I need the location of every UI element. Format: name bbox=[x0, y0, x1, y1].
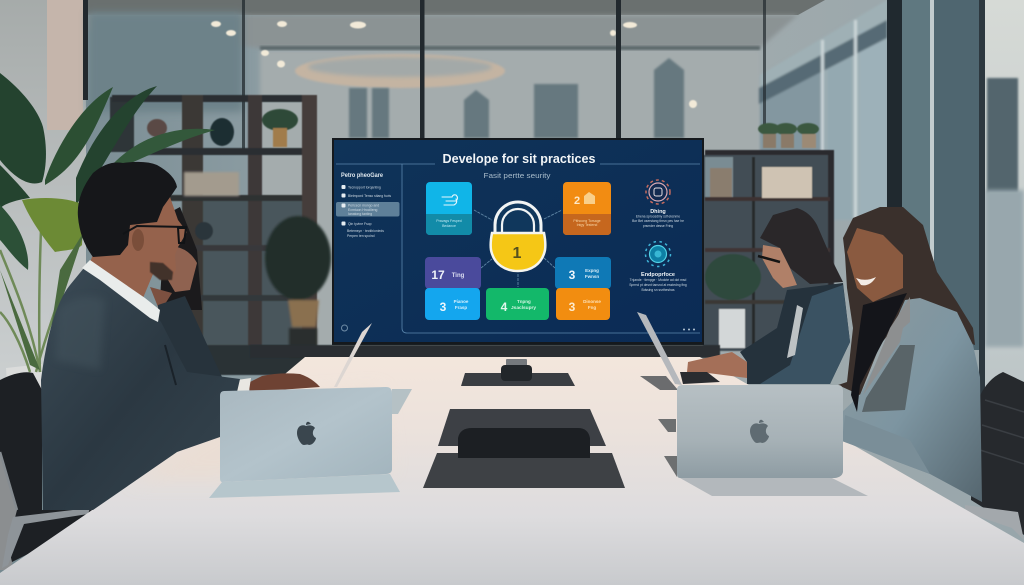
man beard bbox=[150, 262, 173, 280]
presentation screen bbox=[332, 138, 704, 345]
man arm crease bbox=[165, 345, 176, 385]
apple logo bbox=[750, 420, 769, 443]
blazer shoulder tone bbox=[760, 285, 850, 384]
books bbox=[762, 167, 812, 198]
curtain and window frame bbox=[887, 0, 902, 300]
sidebar items: Blelmpord Tenso stiang fuvis bbox=[348, 194, 391, 198]
left glass reflection bbox=[88, 12, 243, 112]
shelf plant bbox=[705, 254, 761, 300]
sidebar items bbox=[347, 186, 391, 238]
laptop lid bbox=[637, 312, 682, 385]
big plant bbox=[0, 73, 215, 400]
padlock bbox=[491, 202, 545, 271]
pad: back bbox=[461, 373, 575, 386]
shirt bbox=[787, 305, 803, 358]
man shirt collar bbox=[82, 260, 160, 322]
shackle bbox=[495, 202, 541, 243]
screen subtitle: Fasit pertte seurity bbox=[484, 171, 551, 180]
card label word: Ting bbox=[452, 273, 465, 279]
device: speaker bbox=[458, 428, 590, 458]
exterior skyscraper bbox=[987, 78, 1018, 193]
lime leaf bbox=[22, 198, 84, 252]
man cuff bbox=[236, 378, 251, 391]
ring ceiling lamp bbox=[295, 54, 505, 88]
curtain one bbox=[902, 0, 930, 300]
woman behind man bbox=[150, 207, 222, 377]
ceiling lower band bbox=[86, 15, 798, 48]
small book group bbox=[710, 168, 732, 197]
card words: Pianoe bbox=[454, 299, 469, 304]
exterior window bbox=[985, 0, 1024, 400]
curtain two bbox=[934, 0, 979, 350]
plant leaves bbox=[0, 73, 215, 270]
label two body: Sprrnd pt desnt tansnd at esstedng fing bbox=[629, 283, 687, 287]
plant pot bbox=[6, 364, 42, 400]
right woman bbox=[838, 207, 982, 502]
sidebar highlight bbox=[336, 202, 400, 216]
shackle inner bbox=[502, 209, 534, 240]
sidebar round icon bbox=[342, 325, 348, 331]
lid bbox=[334, 323, 372, 387]
label two body: Tnjande · tlenpge · Modcte ad dot msd bbox=[630, 278, 686, 282]
dark glass mullions bbox=[83, 0, 766, 150]
man jacket bbox=[41, 263, 240, 510]
screen rules bbox=[336, 164, 700, 333]
man neck and face bbox=[90, 197, 187, 298]
man arm hand bbox=[248, 373, 320, 392]
card caption second line: Intgy Testend bbox=[577, 223, 597, 227]
laptop shadow bbox=[680, 478, 868, 496]
hair bbox=[160, 207, 202, 310]
label one body: Bor Bet oserstang thrsn pes hae he bbox=[632, 219, 684, 223]
card caption second line: Bedance bbox=[442, 224, 456, 228]
warm reflection bbox=[130, 390, 390, 480]
binders bbox=[719, 309, 745, 348]
wall column bbox=[47, 0, 83, 130]
smile bbox=[856, 277, 876, 285]
apple logo bbox=[297, 422, 316, 445]
card words: Dinonse bbox=[583, 299, 601, 304]
plant stems bbox=[0, 205, 84, 372]
card words: Expng bbox=[585, 268, 599, 273]
card: orange bottom bbox=[556, 288, 610, 320]
shelf red vase bbox=[147, 119, 167, 137]
sun inner disc bbox=[650, 246, 666, 262]
ring lamp inner bbox=[308, 57, 492, 77]
pad: front bbox=[423, 453, 625, 488]
sidebar items: Betemsyn · tectibionieds bbox=[347, 229, 384, 233]
card number: 3 bbox=[569, 300, 576, 314]
chair left bbox=[0, 372, 93, 570]
chair frame bbox=[0, 452, 17, 510]
laptop lid bbox=[220, 387, 392, 482]
keyboard bbox=[680, 372, 720, 384]
pad: right edge bbox=[640, 376, 678, 390]
face bbox=[762, 245, 797, 288]
floor plant bbox=[265, 216, 331, 358]
lock body bbox=[491, 233, 545, 271]
pad: middle bbox=[438, 409, 606, 446]
sidebar heading: Petro pheoGare bbox=[341, 173, 384, 179]
exterior blurred city bbox=[985, 190, 1024, 347]
man ear bbox=[132, 229, 144, 251]
hair behind bbox=[838, 207, 975, 395]
back left laptop bbox=[334, 323, 412, 414]
man hair bbox=[78, 162, 177, 257]
card: purple bbox=[425, 257, 481, 289]
shelf left bbox=[110, 95, 331, 375]
label two body: Bdssing sn ssrtheshas bbox=[642, 288, 675, 292]
sun glyph bbox=[654, 250, 662, 258]
card words second line: Frasp bbox=[455, 305, 467, 310]
thin leaf blades bbox=[0, 230, 85, 370]
laptop mat bbox=[392, 389, 412, 414]
laptop front right bbox=[664, 385, 868, 496]
sidebar items: Exmtuon Hrocilleng bbox=[348, 208, 378, 212]
card number: 3 bbox=[440, 300, 447, 314]
label two body bbox=[629, 278, 687, 292]
sidebar items: Ianatong taxting bbox=[348, 212, 372, 216]
curtain highlight bbox=[930, 0, 934, 300]
card: top left bbox=[426, 182, 472, 235]
card label: 17 bbox=[431, 268, 445, 282]
screen bezel bbox=[332, 138, 704, 345]
card number: 3 bbox=[569, 268, 576, 282]
neck bbox=[150, 287, 172, 312]
card number: 2 bbox=[574, 195, 580, 207]
card number: 4 bbox=[501, 300, 508, 314]
blazer dark panel bbox=[862, 345, 915, 412]
shelf right bbox=[703, 123, 834, 351]
card caption: Pithoong Torsage bbox=[573, 219, 601, 223]
hands bbox=[687, 352, 747, 378]
hair bbox=[760, 208, 843, 284]
back woman bbox=[637, 208, 850, 385]
window frame edge bbox=[979, 0, 985, 400]
laptop lid bbox=[677, 385, 843, 478]
right label two: Endpoprfoce bbox=[641, 272, 675, 278]
blazer bbox=[740, 283, 850, 384]
screen panel bbox=[334, 140, 702, 342]
chair back bbox=[0, 372, 93, 562]
connector lines bbox=[474, 210, 562, 287]
label one body: prsmder desse Fring bbox=[643, 224, 673, 228]
laptop shadow bbox=[209, 474, 400, 498]
card lower band bbox=[563, 214, 611, 235]
right label two bbox=[629, 272, 687, 292]
left wall bbox=[0, 0, 86, 400]
card icon bbox=[584, 192, 595, 204]
man glasses bbox=[123, 226, 187, 243]
dark strip under screen bbox=[250, 345, 720, 358]
label one body bbox=[632, 214, 684, 228]
badge inner ring bbox=[649, 183, 667, 201]
sidebar items: Peircecn mongo and bbox=[348, 204, 379, 208]
jacket bbox=[158, 296, 222, 377]
glasses bbox=[758, 256, 780, 262]
right label one: Dhing bbox=[650, 209, 666, 215]
man jacket highlight bbox=[55, 297, 105, 370]
sidebar items: Qin tyvine Fsop bbox=[348, 222, 372, 226]
books on shelf bbox=[184, 172, 239, 196]
shelf globe lamp bbox=[195, 222, 213, 240]
card words: Tnpng bbox=[517, 299, 531, 304]
shelf pot plant bbox=[262, 109, 298, 147]
card icon bbox=[442, 195, 458, 205]
ceiling beam bbox=[260, 46, 760, 50]
table bbox=[0, 357, 1024, 585]
right side window bays bbox=[759, 0, 887, 220]
blurred towers bbox=[349, 58, 684, 138]
far wall bbox=[260, 50, 760, 350]
sidebar bullets bbox=[342, 185, 346, 226]
card words second line: Jsaclsupry bbox=[511, 305, 536, 311]
chair armrest bbox=[2, 508, 90, 568]
card: blue left bbox=[425, 288, 480, 320]
lapel bbox=[863, 297, 910, 395]
face bbox=[847, 228, 903, 302]
laptop front left bbox=[209, 387, 400, 498]
man bbox=[41, 162, 320, 510]
card: green bbox=[486, 288, 549, 320]
device: back hub bbox=[501, 359, 532, 381]
blazer bbox=[842, 298, 982, 502]
chair armrest bbox=[965, 505, 1024, 540]
laptop hinge mat bbox=[664, 456, 677, 477]
icon: sun badge bbox=[646, 242, 670, 266]
pagination dots bbox=[683, 328, 695, 330]
card words second line: Fwnsn bbox=[585, 274, 599, 279]
chair right bbox=[965, 372, 1024, 540]
ceiling spot lights bbox=[211, 21, 697, 108]
badge glyph bbox=[654, 188, 662, 196]
lock number: 1 bbox=[513, 245, 522, 262]
card: top right bbox=[563, 182, 611, 235]
sidebar items: Perpen ten spoind bbox=[347, 234, 375, 238]
chair stripes bbox=[980, 400, 1024, 464]
card lower band bbox=[426, 214, 472, 235]
table top bbox=[0, 357, 1024, 585]
face bbox=[168, 247, 197, 292]
ceiling bbox=[86, 0, 825, 15]
pad: right small bbox=[658, 419, 676, 432]
top plants bbox=[758, 123, 819, 148]
label one body: Ehena sproosdiny sdf eksnme bbox=[636, 214, 680, 218]
screen title: Develope for sit practices bbox=[442, 151, 596, 166]
floor patch bbox=[0, 440, 30, 570]
card words second line: Fng bbox=[588, 305, 596, 310]
sidebar bbox=[336, 173, 400, 331]
sidebar items: Tecnopport torqanting bbox=[348, 186, 381, 190]
icon: gear badge bbox=[646, 180, 670, 204]
right label one bbox=[632, 209, 684, 228]
card caption: Pravags Fesped bbox=[436, 219, 462, 223]
shelf dark vase bbox=[210, 118, 234, 146]
card: blue right bbox=[555, 257, 611, 289]
turtleneck bbox=[851, 293, 907, 412]
arm shadow bbox=[842, 415, 930, 474]
